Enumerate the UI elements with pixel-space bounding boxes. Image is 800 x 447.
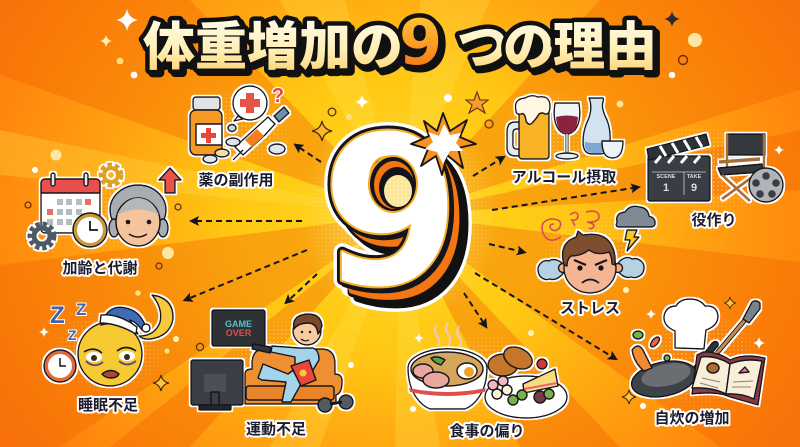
arrow: to alcohol xyxy=(473,160,499,176)
arrow: to ageing xyxy=(197,220,302,222)
big number 9: 9 xyxy=(323,93,459,332)
arrow: to acting roles xyxy=(492,188,633,210)
title: 体重増加の xyxy=(143,19,403,77)
icon: acting roles: SCENE xyxy=(657,174,676,180)
icon: sleeping Z letters: Z xyxy=(50,302,65,329)
icon: home cooking xyxy=(628,299,765,405)
icon: sleep xyxy=(44,295,173,386)
label: acting roles: 役作り xyxy=(691,211,737,229)
inner counter of the 9 xyxy=(368,155,418,213)
arrows xyxy=(190,148,633,356)
arrow: to cooking xyxy=(475,273,611,356)
icon: acting roles: TAKE xyxy=(687,174,702,180)
arrow: to sleep xyxy=(190,250,307,298)
icon: sleeping Z letters: Z xyxy=(68,327,77,343)
icon: lack of exercise xyxy=(191,310,353,412)
title: 体重増加の xyxy=(146,22,406,80)
label: home cooking: 自炊の増加 xyxy=(654,409,730,427)
arrow: to medication xyxy=(300,148,321,162)
icon: ramen steam xyxy=(435,322,461,347)
title: 理由 xyxy=(556,22,660,80)
icon: medicine xyxy=(190,86,289,163)
icon: question mark: ? xyxy=(272,85,284,107)
label: ageing: 加齢と代謝 xyxy=(62,259,138,277)
icon: ageing xyxy=(31,166,181,247)
icon: lack of exercise: GAME xyxy=(225,319,252,329)
big number 9: 9 xyxy=(332,104,469,343)
star decoration xyxy=(466,92,488,113)
big number 9: 9 xyxy=(323,93,459,332)
halftone glows behind icons xyxy=(30,86,777,420)
icon: acting roles: 1 xyxy=(663,182,669,194)
big number 9: 9 xyxy=(325,96,462,335)
arrow: to stress xyxy=(489,244,519,251)
big number 9: 9 xyxy=(333,105,470,344)
big number 9: 9 xyxy=(339,110,476,349)
title: つ xyxy=(457,19,509,77)
label: sleep: 睡眠不足 xyxy=(78,397,138,414)
icon: red stress spirals xyxy=(542,211,599,240)
icon: acting roles xyxy=(647,134,783,202)
arrow: to exercise xyxy=(290,274,317,299)
big number 9: 9 xyxy=(330,101,467,340)
title: 9 xyxy=(399,6,442,79)
big number 9: 9 xyxy=(329,100,466,339)
icon: sleeping Z letters xyxy=(50,300,86,343)
title: の xyxy=(503,19,555,77)
icon: acting roles: 9 xyxy=(691,182,697,194)
label: alcohol: アルコール摂取 xyxy=(512,169,616,186)
icon: alcohol xyxy=(507,96,623,159)
title: の xyxy=(506,22,558,80)
big number 9: 9 xyxy=(323,93,459,332)
label: lack of exercise: 運動不足 xyxy=(246,421,306,438)
label: stress: ストレス xyxy=(560,300,620,317)
big number 9: 9 xyxy=(339,110,476,349)
label: unbalanced diet: 食事の偏り xyxy=(449,422,525,440)
label: medication: 薬の副作用 xyxy=(198,172,274,189)
icon: stress xyxy=(538,206,655,293)
title: 理由 xyxy=(553,19,657,77)
arrow: to diet xyxy=(464,293,483,322)
burst on number 9 xyxy=(411,113,476,175)
icon: unbalanced diet xyxy=(408,343,567,418)
icon: sleeping Z letters: Z xyxy=(76,300,86,319)
title: 9 xyxy=(402,9,445,82)
title xyxy=(143,6,660,82)
big number 9: 9 xyxy=(323,93,459,332)
icon: lack of exercise: OVER xyxy=(226,328,252,338)
title: つ xyxy=(460,22,512,80)
